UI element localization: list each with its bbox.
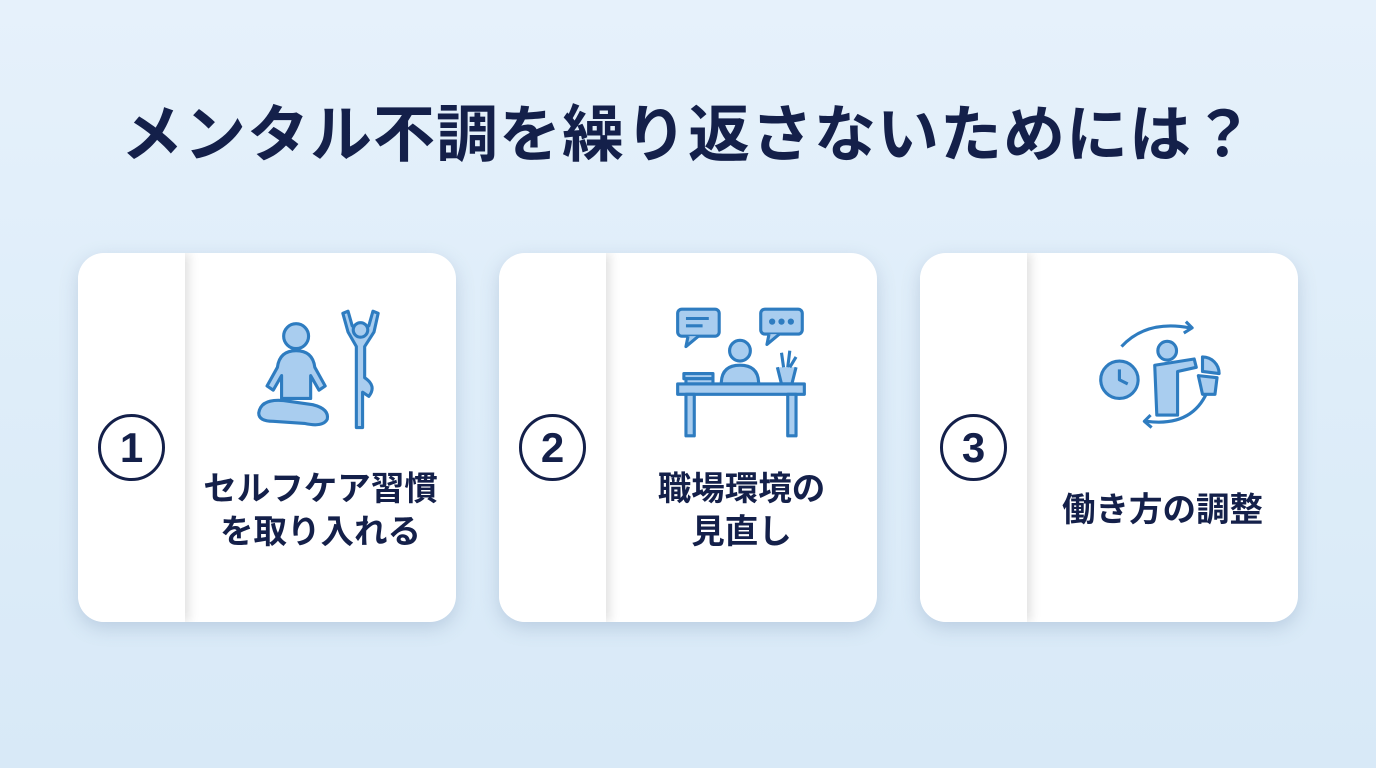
text 3: 働き方の調整 <box>1062 492 1263 529</box>
text 2: 職場環境の <box>658 471 825 508</box>
title: メンタル不調を繰り返さないためには？ <box>121 101 1255 170</box>
text 1: セルフケア習慣 <box>203 471 438 508</box>
icon: meditation and yoga <box>257 310 380 430</box>
text 1: を取り入れる <box>220 514 421 551</box>
panel: card 2 <box>499 253 877 622</box>
number tab 1 <box>78 253 185 622</box>
text 2 <box>658 471 825 551</box>
icon: work adjustment <box>1099 320 1221 429</box>
panel: card 1 <box>78 253 456 622</box>
number tab 2: 2 <box>541 424 564 471</box>
number tab 3 <box>920 253 1027 622</box>
number tab 1: 1 <box>120 424 143 471</box>
number tab 3: 3 <box>962 424 985 471</box>
text 2: 見直し <box>691 514 792 551</box>
panel: card 3 <box>920 253 1298 622</box>
icon: workplace desk <box>676 308 806 438</box>
text 1 <box>203 471 438 551</box>
number tab 2 <box>499 253 606 622</box>
